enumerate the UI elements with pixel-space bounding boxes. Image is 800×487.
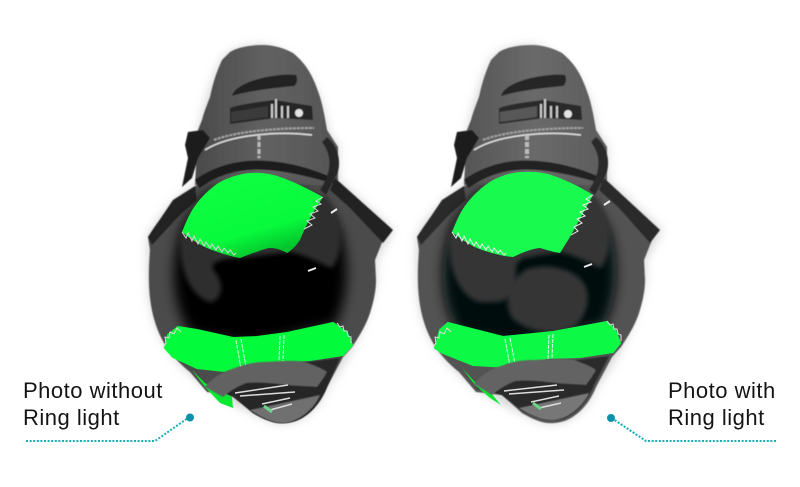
upper vent [232, 75, 297, 96]
padding strip right [330, 178, 393, 243]
inner hole [174, 190, 347, 345]
side clasp [451, 130, 479, 187]
leader line [613, 419, 776, 441]
green lower scrap [462, 368, 501, 405]
inner foot hump [449, 195, 610, 302]
upper stitching [452, 195, 593, 255]
toe highlights [235, 385, 295, 410]
green upper patch [452, 172, 593, 257]
tongue flap [205, 361, 327, 397]
lower shell [148, 165, 383, 423]
toe [476, 356, 609, 420]
toe [207, 358, 340, 423]
green lower band [165, 323, 352, 372]
boot photo without ring light [148, 45, 393, 423]
collar [197, 162, 333, 186]
buckle [230, 99, 313, 124]
lower stitching [505, 334, 553, 366]
white crease [584, 201, 610, 267]
toe grey cap [519, 393, 589, 420]
soft shadow [148, 45, 393, 423]
soft shadow [417, 45, 662, 423]
visible inner tongue [508, 266, 588, 332]
white crease [308, 209, 337, 271]
leader dot [607, 414, 615, 422]
leader dot [186, 414, 194, 422]
toe grey cap [250, 395, 320, 423]
leader line [26, 418, 188, 441]
padding strip left [148, 186, 197, 245]
callout: photo without ring light: Ring light [23, 405, 120, 430]
callout: photo with ring light [607, 378, 776, 441]
boot photo with ring light [417, 45, 662, 423]
collar [466, 162, 602, 186]
padding strip right [599, 178, 660, 243]
upper vent [501, 75, 566, 96]
strap [589, 137, 608, 195]
green upper patch [182, 173, 323, 258]
label text: Photo without [23, 378, 163, 403]
callout: photo with ring light: Ring light [668, 405, 765, 430]
white strip lines [205, 133, 312, 150]
toe highlights [504, 385, 564, 408]
cuff [195, 45, 338, 185]
label text: Photo with [668, 378, 776, 403]
inner hole [443, 190, 616, 345]
cuff [464, 45, 607, 185]
white strip lines [474, 133, 581, 150]
lower shell [417, 165, 652, 423]
buckle [499, 99, 582, 124]
upper stitching [182, 197, 323, 255]
lower stitching [236, 335, 284, 369]
callout: photo without ring light [23, 378, 194, 441]
padding strip left [417, 186, 466, 245]
green lower scrap [192, 370, 233, 408]
side clasp [182, 130, 210, 187]
green lower band [435, 322, 620, 367]
tongue flap [474, 359, 596, 395]
inner foot hump [180, 195, 341, 302]
strap [320, 137, 339, 195]
